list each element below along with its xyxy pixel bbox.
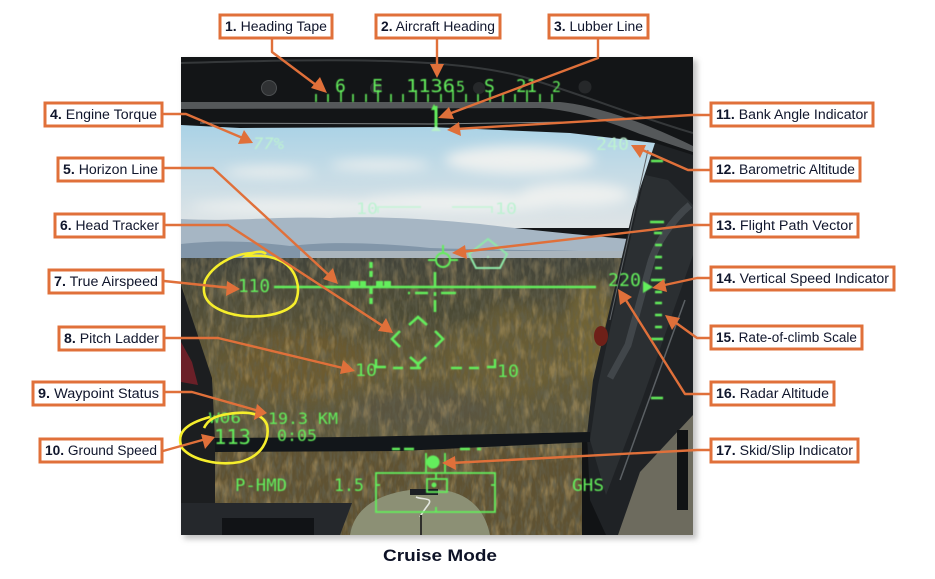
callout 9: waypoint status [33,382,267,420]
callout 8: pitch ladder: 8. Pitch Ladder [64,331,160,346]
head tracker [392,317,443,368]
aircraft heading marker and lubber line [431,104,441,131]
horizon line [274,262,596,304]
waypoint status: 19.3 KM [268,409,338,428]
heading tape [316,76,561,102]
mode text: P-HMD [235,476,287,496]
callout 7: true airspeed: 7. True Airspeed [54,274,158,289]
heading tape: 21 [516,76,537,97]
top frame [181,124,693,155]
flight path vector [428,245,458,267]
callout 3: lubber line: 3. Lubber Line [554,19,643,34]
callout 10: ground speed: 10. Ground Speed [45,443,157,458]
left post [181,285,215,448]
pitch ladder [355,199,519,382]
engine torque: 77% [253,134,284,153]
rate-of-climb scale [650,161,665,398]
true airspeed: 110 [238,276,270,297]
pitch ladder: 10 [356,199,378,218]
callout 2: aircraft heading [376,15,500,78]
callout 15: rate-of-climb scale [665,315,862,349]
callout 16: radar altitude: 16. Radar Altitude [716,386,829,401]
callout 14: vertical speed indicator [652,267,894,292]
callout 14: vertical speed indicator: 14. Vertical Speed Indicator [716,271,890,286]
callout 12: barometric altitude: 12. Barometric Altitude [716,162,855,177]
heading tape: 2 [552,78,561,96]
callout 2: aircraft heading: 2. Aircraft Heading [381,19,495,34]
callout 6: head tracker [55,214,393,333]
flight director [408,272,456,312]
caption: Cruise Mode [383,546,497,565]
photo: cockpit view in cruise mode [181,57,697,539]
mode text: GHS [572,476,604,496]
barometric altitude: 240 [596,135,629,155]
callout 11: bank angle indicator: 11. Bank Angle Indicator [716,107,869,122]
waypoint status: 0:05 [277,426,317,445]
callout 9: waypoint status: 9. Waypoint Status [38,386,159,401]
helmet [350,489,490,535]
lower forest strip [215,448,590,535]
heading tape: E [372,76,383,97]
callout 8: pitch ladder [59,327,355,374]
pitch ladder: 10 [355,361,377,381]
heading tape: 6 [335,76,346,97]
pitch ladder: 10 [495,199,517,218]
heading tape: 1136 [406,76,455,97]
heading tape: S [484,76,495,97]
yellow circle: ground speed [180,413,268,463]
waypoint status [209,409,338,445]
callout 10: ground speed [40,434,215,462]
waypoint box marker [469,239,507,268]
callout 4: engine torque: 4. Engine Torque [50,107,157,122]
callout 1: heading tape [220,15,332,93]
callout 13: flight path vector [452,214,858,259]
callout 12: barometric altitude [631,145,860,181]
waypoint status: W06 [209,411,241,427]
callout 6: head tracker: 6. Head Tracker [60,218,160,233]
yellow circle: true airspeed [204,252,298,316]
radar altitude: 220 [608,270,641,291]
callout 15: rate-of-climb scale: 15. Rate-of-climb Scale [716,330,857,345]
callout 17: skid/slip indicator [442,439,858,470]
ground speed: 113 [214,425,251,449]
skid/slip indicator [376,453,495,512]
sky [181,124,661,228]
pitch ladder: 10 [497,362,519,382]
HUD symbology [209,76,665,512]
heading tape: 5 [456,78,465,96]
callout 5: horizon line [58,158,338,284]
lower canopy bar [215,432,590,452]
mode text [235,476,604,496]
callout 13: flight path vector: 13. Flight Path Vector [716,218,854,233]
callout 1: heading tape: 1. Heading Tape [225,19,327,34]
mountains [181,217,626,251]
forest [181,258,651,448]
callout 11: bank angle indicator [447,103,873,136]
callout 17: skid/slip indicator: 17. Skid/Slip Indicator [716,443,854,458]
callout 5: horizon line: 5. Horizon Line [63,162,158,177]
callout 4: engine torque [45,103,253,144]
right post [587,143,693,535]
callout 16: radar altitude [618,289,834,405]
callout 3: lubber line [438,15,648,119]
vertical speed indicator [643,281,653,293]
mode text: 1.5 [334,476,364,496]
callout 7: true airspeed [49,270,240,296]
